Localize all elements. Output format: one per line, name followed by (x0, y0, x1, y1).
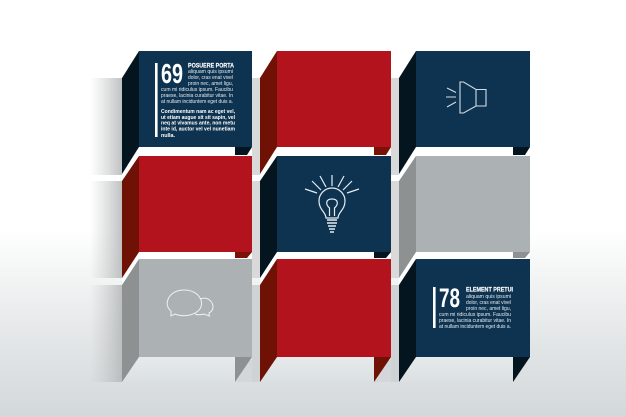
body text: at nullam inciduntem eget duis a. (161, 99, 233, 105)
panel: navy lightbulb (260, 156, 391, 278)
left shadows (90, 78, 399, 382)
body text: dolor, cras enat vivel (188, 75, 233, 81)
heading: posuere porta: POSUERE PORTA (188, 62, 234, 70)
body text: praese, lacinia curabitur vitae. In (439, 318, 511, 324)
body text: aliquam quis ipsumi (466, 294, 511, 300)
body text: cum mi ridiculus ipsum. Faucibu (161, 87, 233, 93)
heading: element pretui: ELEMENT PRETUI (466, 286, 513, 294)
panel: red bottom center (260, 259, 391, 382)
floor below bottom row (122, 357, 513, 382)
number 78: 78 (439, 283, 460, 313)
panel: red top center (260, 51, 391, 174)
panel: navy speaker (399, 51, 530, 174)
body text (161, 69, 233, 105)
bold body text: nulla. (161, 133, 175, 139)
icon: speech bubbles (167, 290, 213, 316)
bold body text: neq at vivamus ante, non metu (161, 121, 235, 127)
white separators (122, 252, 530, 285)
bold body text: Condimentum nam ac eget vel, (161, 109, 235, 115)
vertical bar (433, 287, 436, 328)
panel: navy text 69 (122, 51, 252, 174)
number 69: 69 (161, 58, 183, 89)
body text: praese, lacinia curabitur vitae. In (161, 93, 233, 99)
body text: proin nec, amet ligu, (188, 81, 233, 87)
body text (439, 294, 511, 330)
bold body text: inte id, auctor vel vel nunetiam (161, 126, 235, 132)
body text: dolor, cras enat vivel (466, 300, 511, 306)
panel: gray middle right (399, 156, 530, 278)
panel: gray speech bubbles (122, 259, 252, 382)
body text: aliquam quis ipsumi (188, 69, 233, 75)
vertical bar (155, 63, 158, 137)
body text: cum mi ridiculus ipsum. Faucibu (439, 312, 511, 318)
panel: navy text 78 (399, 259, 530, 382)
body text: at nullam inciduntem eget duis a. (439, 324, 511, 330)
panel: red middle left (122, 156, 252, 278)
icon: speaker (446, 82, 486, 113)
body text: proin nec, amet ligu, (466, 306, 511, 312)
bold body text: ut etiam augue sit sit sapin, vel (161, 115, 235, 121)
bold body text (161, 109, 235, 139)
icon: lightbulb (305, 175, 359, 232)
